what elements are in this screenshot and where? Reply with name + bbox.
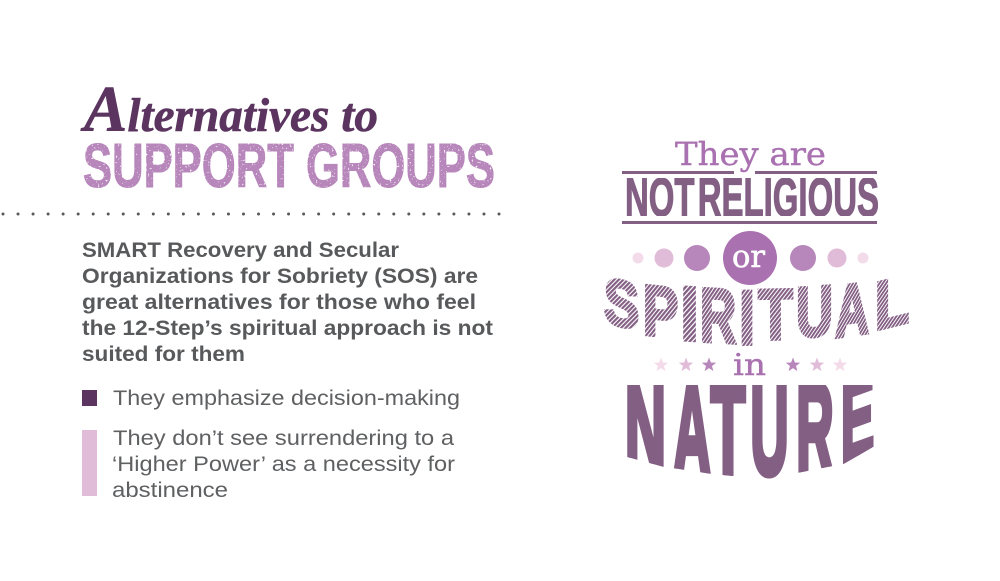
bullet: higher power xyxy=(82,427,455,502)
text block: intro paragraph: the 12-Step’s spiritual approach is not xyxy=(82,317,493,340)
text block: intro paragraph: Organizations for Sobriety (SOS) are xyxy=(82,265,478,288)
text: Spiritual: I xyxy=(680,271,699,357)
text: Spiritual: I xyxy=(739,276,755,361)
text: Spiritual: L xyxy=(875,261,909,345)
text: Spiritual: R xyxy=(700,273,736,359)
dot row with or xyxy=(632,231,868,285)
bullet: higher power: They don’t see surrendering to a xyxy=(113,427,454,450)
text: Nature: N xyxy=(625,360,666,497)
bullet: decision-making: They emphasize decision-making xyxy=(113,387,460,410)
dotted divider xyxy=(3,212,499,216)
text block: intro paragraph: great alternatives for those who feel xyxy=(82,291,476,314)
text: Nature: R xyxy=(796,356,834,502)
text: Nature: A xyxy=(673,358,711,505)
text: Nature xyxy=(627,385,874,478)
bullet: higher power: abstinence xyxy=(112,479,228,502)
text: They are: They are xyxy=(675,135,826,173)
text block: intro paragraph xyxy=(82,239,493,366)
bullet: higher power: ‘Higher Power’ as a necessity for xyxy=(112,453,455,476)
text: in: in xyxy=(733,348,766,383)
panel: typographic quote xyxy=(604,135,909,507)
text: Nature: T xyxy=(711,356,745,507)
text block: intro paragraph: suited for them xyxy=(82,343,245,366)
text: Spiritual: P xyxy=(643,271,678,354)
panel: left column xyxy=(3,73,499,502)
text: or: or xyxy=(732,239,765,275)
heading: Support Groups: SUPPORT GROUPS xyxy=(83,131,495,201)
text: Spiritual xyxy=(604,261,909,361)
text: Spiritual: U xyxy=(796,272,833,353)
text: Nature: U xyxy=(750,357,789,503)
text: Spiritual: T xyxy=(758,274,793,355)
text: Spiritual: S xyxy=(604,264,639,344)
text: Nature: E xyxy=(841,352,874,486)
star row with in xyxy=(654,348,847,383)
title xyxy=(80,73,495,201)
text: Spiritual: A xyxy=(835,267,869,354)
rules around Not Religious xyxy=(622,171,877,224)
text block: intro paragraph: SMART Recovery and Secular xyxy=(82,239,399,262)
heading: Alternatives to: Alternatives to xyxy=(80,73,378,146)
